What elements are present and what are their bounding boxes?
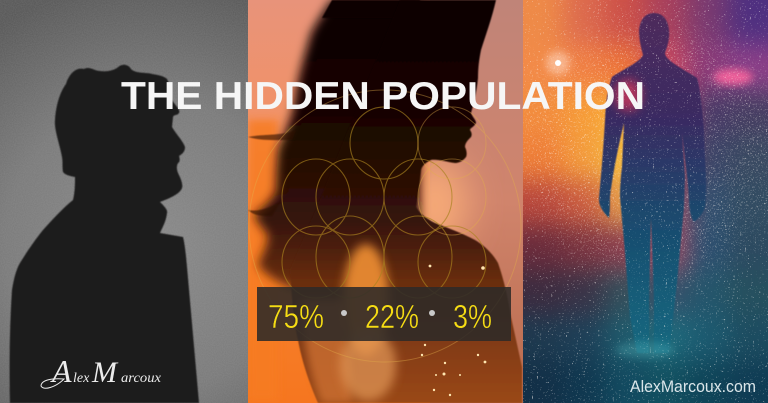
- shoulder glow: [343, 244, 389, 356]
- stats callout bar: [257, 287, 511, 341]
- panel: middle orange silhouette with sacred geometry: [248, 0, 523, 403]
- panel: left grayscale silhouette: [0, 0, 248, 403]
- sacred geometry circles: [282, 107, 486, 298]
- hair wisps: [248, 130, 296, 216]
- panel: right cosmic figure: [523, 0, 768, 403]
- icon: woman long hair, soft edge: [254, 0, 420, 290]
- left body warm tone: [300, 300, 352, 403]
- icon: human figure made of stars: [599, 13, 706, 353]
- signature: arcoux: [121, 371, 162, 386]
- stat: 22%: 22%: [365, 298, 419, 335]
- stat: 75%: 75%: [268, 298, 324, 335]
- separator dot: [429, 310, 435, 316]
- stat: 3%: 3%: [453, 298, 492, 335]
- nebula colour mesh: [523, 0, 768, 403]
- signature: A: [50, 353, 72, 389]
- icon: woman face and body silhouette: [290, 0, 522, 403]
- icon: man silhouette in profile: [10, 65, 199, 403]
- hair crown at top edge: [322, 0, 420, 18]
- bright star: [546, 51, 570, 75]
- signature: lex: [73, 371, 90, 386]
- pink nebula: [713, 69, 753, 85]
- pink chest tint: [614, 79, 642, 111]
- sparkles on shoulder: [421, 265, 486, 396]
- star field: [523, 0, 768, 403]
- signature: M: [91, 356, 119, 389]
- separator dot: [341, 310, 347, 316]
- dense stars around the figure: [523, 6, 768, 294]
- signature: [40, 361, 161, 389]
- website url: AlexMarcoux.com: [630, 378, 756, 396]
- title: THE HIDDEN POPULATION: [121, 75, 645, 118]
- teal footglow: [615, 342, 675, 358]
